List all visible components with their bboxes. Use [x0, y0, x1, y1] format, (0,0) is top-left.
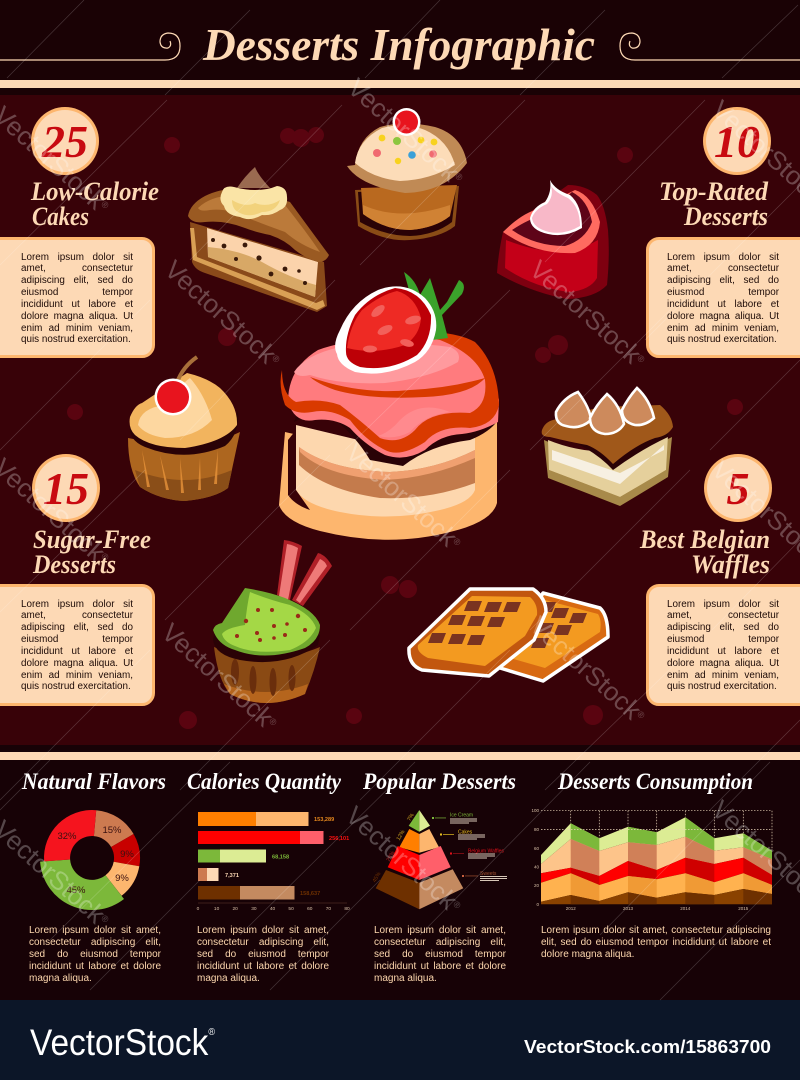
watermark overlay: ® — [451, 536, 463, 548]
panel: low-calorie cakes text: quis nostrud exercitation. — [21, 334, 131, 345]
panel: low-calorie cakes text: eiusmod tempor — [21, 287, 133, 298]
watermark overlay: ® — [453, 171, 465, 183]
percent labels: 45% — [66, 885, 86, 896]
heading: Best Belgian Waffles: Best Belgian — [639, 525, 770, 554]
bar chart: 70 — [326, 906, 331, 912]
segment: 9% dark red — [111, 834, 140, 866]
heading: Sugar-Free Desserts: Desserts — [32, 550, 116, 579]
bar chart: 20 — [233, 906, 238, 912]
pyramid chart: 45% — [372, 871, 383, 884]
panel: top-rated desserts text: amet, consectetur — [667, 263, 779, 274]
badge: 15: 15 — [43, 463, 89, 514]
pyramid chart: 7% — [407, 812, 416, 822]
background silhouettes — [67, 127, 743, 729]
bar chart: 153,289 — [314, 817, 334, 823]
bar chart: 158,637 — [300, 891, 320, 897]
bar chart: 0 — [197, 906, 200, 912]
panel: low-calorie cakes text: Lorem ipsum dolor sit — [21, 252, 133, 262]
area chart: 20 — [534, 883, 539, 888]
area chart — [531, 808, 772, 911]
area chart: 60 — [534, 846, 539, 851]
segment: 9% peach — [106, 862, 139, 896]
footer url: VectorStock.com/15863700 — [524, 1037, 771, 1057]
heading: Best Belgian Waffles — [639, 525, 770, 579]
donut chart — [40, 810, 140, 910]
badge: 10: 10 — [714, 116, 760, 167]
pyramid chart: 12% — [396, 829, 407, 842]
footer logo: VectorStock — [30, 1022, 227, 1063]
segment: 45% — [40, 860, 124, 910]
panel: top-rated desserts text: enim ad minim veniam, — [667, 323, 779, 334]
heading: Popular Desserts: Popular Desserts — [362, 769, 516, 794]
watermark overlay: VectorStock — [340, 800, 463, 915]
layer: brown — [541, 889, 772, 904]
heading: Top-Rated Desserts: Desserts — [683, 202, 768, 231]
text: calories quantity: magna aliqua. — [197, 973, 260, 984]
panel: top-rated desserts text — [646, 237, 800, 358]
text: popular desserts: incididunt ut labore et dolore — [374, 961, 506, 972]
text: popular desserts: consectetur adipiscing elit, — [374, 937, 506, 948]
bar chart — [197, 812, 350, 912]
pyramid chart: 28% — [386, 850, 397, 863]
bar chart: 30 — [251, 906, 257, 912]
panel: sugar-free desserts text: adipiscing elit, sed do — [21, 622, 133, 633]
heading: Best Belgian Waffles: Waffles — [691, 550, 770, 579]
watermark overlay: ® — [635, 353, 647, 365]
percent labels — [57, 825, 134, 896]
watermark overlay: VectorStock — [342, 72, 465, 187]
panel: sugar-free desserts text: dolore magna aliqua. Ut — [21, 658, 133, 669]
panel: low-calorie cakes text: enim ad minim veniam, — [21, 323, 133, 334]
bar chart: 50 — [288, 906, 294, 912]
text: natural flavors: incididunt ut labore et dolore — [29, 961, 161, 972]
dessert: cherry cupcake — [128, 357, 240, 501]
watermark overlay: VectorStock — [159, 254, 282, 369]
badge: 5: 5 — [726, 463, 750, 514]
pyramid chart: Belgium Waffles — [468, 848, 504, 854]
area chart: 2012 — [566, 906, 576, 911]
panel: sugar-free desserts text: incididunt ut labore et — [21, 646, 133, 657]
heading: Low-Calorie Cakes — [30, 177, 159, 231]
bar chart: 60 — [307, 906, 313, 912]
panel: belgian waffles text: adipiscing elit, sed do — [667, 622, 779, 633]
panel: low-calorie cakes text: adipiscing elit, sed do — [21, 275, 133, 286]
panel: belgian waffles text — [646, 584, 800, 706]
dessert: matcha cupcake — [213, 540, 332, 703]
badge: 25: 25 — [41, 116, 88, 167]
percent labels: 15% — [102, 825, 122, 836]
watermark overlay: ® — [635, 709, 647, 721]
text: natural flavors: sed do eiusmod tempor — [29, 949, 161, 960]
pyramid chart: Cakes — [458, 830, 473, 836]
panel: low-calorie cakes text — [0, 237, 155, 358]
footer logo: ® — [208, 1027, 216, 1038]
bar chart: 10 — [214, 906, 220, 912]
heading: Top-Rated Desserts: Top-Rated — [659, 177, 769, 206]
area chart: 2014 — [680, 906, 691, 911]
panel: belgian waffles text: amet, consectetur — [667, 610, 779, 621]
heading: Low-Calorie Cakes: Low-Calorie — [30, 177, 159, 206]
pyramid chart — [372, 810, 507, 909]
panel: sugar-free desserts text: eiusmod tempor — [21, 634, 133, 645]
watermark overlay: ® — [270, 353, 282, 365]
text: natural flavors: magna aliqua. — [29, 973, 92, 984]
watermark overlay: ® — [99, 913, 111, 925]
text: popular desserts — [374, 925, 506, 984]
dessert: sprinkled cupcake — [347, 108, 467, 240]
panel: top-rated desserts text: quis nostrud exercitation. — [667, 334, 777, 345]
segment: 15% — [94, 810, 134, 847]
watermark overlay: VectorStock — [524, 254, 647, 369]
layer: orange — [541, 873, 772, 902]
text: calories quantity: sed do eiusmod tempor — [197, 949, 329, 960]
panel: sugar-free desserts text: quis nostrud exercitation. — [21, 681, 131, 692]
badge: 15 — [32, 454, 100, 522]
panel: belgian waffles text: quis nostrud exercitation. — [667, 681, 777, 692]
heading: Low-Calorie Cakes: Cakes — [32, 202, 89, 231]
dessert: tiramisu slice — [542, 388, 673, 506]
badge: 5 — [704, 454, 772, 522]
watermark overlay: ® — [451, 899, 463, 911]
panel: top-rated desserts text: Lorem ipsum dolor sit — [667, 252, 779, 262]
text: calories quantity: consectetur adipiscing elit, — [197, 937, 329, 948]
text: natural flavors: consectetur adipiscing elit, — [29, 937, 161, 948]
panel: sugar-free desserts text — [0, 584, 155, 706]
text: calories quantity: Lorem ipsum dolor sit amet, — [197, 925, 329, 936]
text: popular desserts: Lorem ipsum dolor sit amet, — [374, 925, 506, 936]
panel: top-rated desserts text: eiusmod tempor — [667, 287, 779, 298]
text: desserts consumption: Lorem ipsum dolor sit amet, consectetur adipiscing — [541, 925, 771, 936]
area chart: 0 — [536, 902, 539, 907]
layer: green — [541, 817, 772, 864]
area chart: 2015 — [738, 906, 749, 911]
dessert: heart cake — [497, 180, 609, 299]
pyramid chart: Sweets — [480, 871, 497, 877]
panel: belgian waffles text: dolore magna aliqua. Ut — [667, 658, 779, 669]
panel: belgian waffles text: incididunt ut labore et — [667, 646, 779, 657]
panel: belgian waffles text: enim ad minim veniam, — [667, 670, 779, 681]
pyramid chart: Ice Cream — [450, 812, 473, 818]
segment: 32% — [44, 810, 96, 861]
panel: sugar-free desserts text: amet, consectetur — [21, 610, 133, 621]
panel: belgian waffles text: eiusmod tempor — [667, 634, 779, 645]
watermark overlay: VectorStock — [524, 610, 647, 725]
watermark overlay: ® — [267, 716, 279, 728]
percent labels: 32% — [57, 831, 77, 842]
panel: low-calorie cakes text: amet, consectetur — [21, 263, 133, 274]
text: calories quantity: incididunt ut labore et dolore — [197, 961, 329, 972]
bar chart: 7,371 — [225, 873, 239, 879]
dessert: tall strawberry cake — [279, 272, 499, 540]
area chart: 40 — [534, 864, 539, 870]
text: calories quantity — [197, 925, 329, 984]
bar chart: 80 — [344, 906, 350, 912]
percent labels: 9% — [120, 849, 134, 860]
bar chart: 40 — [270, 906, 275, 912]
text: natural flavors — [29, 925, 161, 984]
watermark overlay: VectorStock — [156, 617, 279, 732]
heading: Top-Rated Desserts — [659, 177, 769, 231]
flourish: left — [0, 33, 180, 60]
panel: low-calorie cakes text: dolore magna aliqua. Ut — [21, 311, 133, 322]
heading: Sugar-Free Desserts — [32, 525, 151, 579]
panel: belgian waffles text: Lorem ipsum dolor sit — [667, 598, 779, 610]
panel: sugar-free desserts text: Lorem ipsum dolor sit — [21, 598, 133, 610]
heading: Sugar-Free Desserts: Sugar-Free — [33, 525, 151, 554]
panel: top-rated desserts text: dolore magna aliqua. Ut — [667, 311, 779, 322]
area chart: 80 — [534, 827, 539, 832]
layer: red — [541, 858, 772, 885]
layer: peach — [541, 837, 772, 876]
panel: top-rated desserts text: adipiscing elit, sed do — [667, 275, 779, 286]
area chart: 100 — [531, 808, 539, 813]
text: popular desserts: sed do eiusmod tempor — [374, 949, 506, 960]
bar chart: 256,101 — [329, 836, 349, 842]
text: popular desserts: magna aliqua. — [374, 973, 437, 984]
watermark overlay: ® — [99, 199, 111, 211]
text: desserts consumption — [541, 925, 771, 960]
percent labels: 9% — [115, 873, 129, 884]
flourish: right — [620, 33, 800, 60]
text: desserts consumption: elit, sed do eiusmod tempor incididunt ut labore et — [541, 937, 771, 948]
badge: 10 — [703, 107, 771, 175]
panel: low-calorie cakes text: incididunt ut labore et — [21, 299, 133, 310]
watermark overlay: VectorStock — [340, 437, 463, 552]
area chart: 2013 — [623, 906, 634, 911]
watermark overlay: ® — [99, 551, 111, 563]
panel: top-rated desserts text: incididunt ut labore et — [667, 299, 779, 310]
dessert: waffles — [409, 589, 608, 681]
text: desserts consumption: dolore magna aliqua. — [541, 949, 634, 960]
bar chart: 68,158 — [272, 854, 289, 860]
text: natural flavors: Lorem ipsum dolor sit amet, — [29, 925, 161, 936]
dessert: cake slice — [188, 167, 329, 312]
title: Desserts Infographic — [202, 19, 595, 70]
panel: sugar-free desserts text: enim ad minim veniam, — [21, 670, 133, 681]
heading: Desserts Consumption: Desserts Consumption — [557, 769, 753, 794]
heading: Calories Quantity: Calories Quantity — [187, 769, 342, 794]
heading: Natural Flavors: Natural Flavors — [21, 769, 166, 794]
badge: 25 — [31, 107, 99, 175]
footer bar — [0, 1000, 800, 1080]
